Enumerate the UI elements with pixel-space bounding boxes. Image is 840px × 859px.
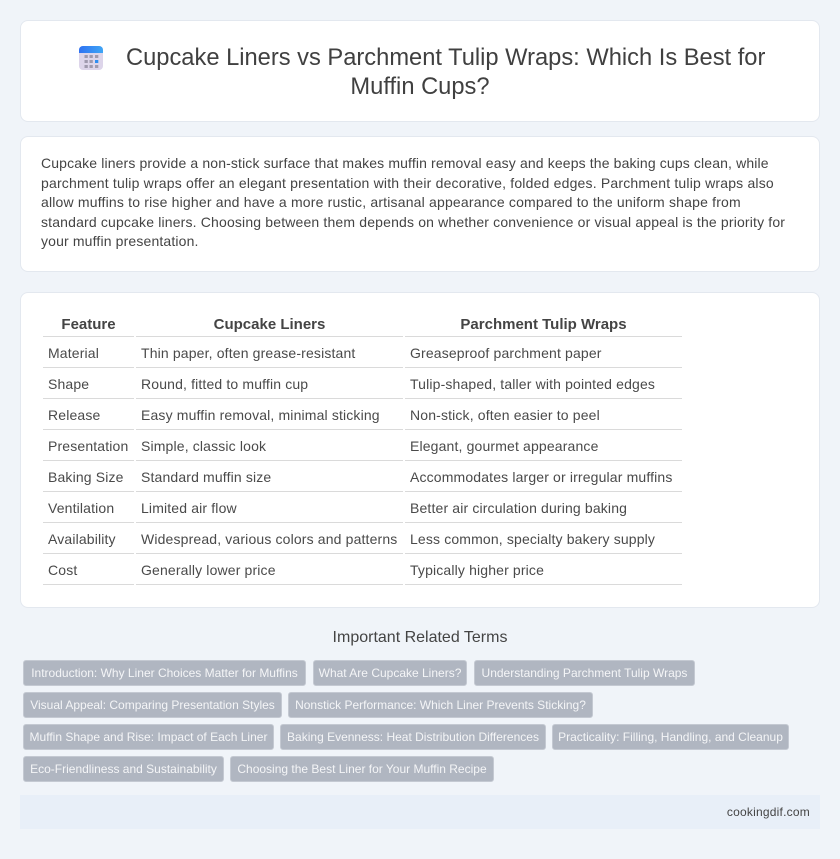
comparison table: Better air circulation during baking bbox=[410, 500, 627, 516]
comparison table: Typically higher price bbox=[410, 562, 544, 578]
related term tags bbox=[23, 660, 789, 782]
related term tags: Muffin Shape and Rise: Impact of Each Liner bbox=[30, 730, 267, 744]
intro text: allow muffins to rise higher and have a more rustic, artisanal appearance compared to the uniform shape from bbox=[41, 194, 741, 210]
comparison table: Availability bbox=[48, 531, 116, 547]
comparison table: Round, fitted to muffin cup bbox=[141, 376, 308, 392]
intro text: parchment tulip wraps offer an elegant presentation with their decorative, folded edges. Parchment tulip wraps also bbox=[41, 174, 774, 190]
comparison table: Limited air flow bbox=[141, 500, 237, 516]
related term tags: Practicality: Filling, Handling, and Cleanup bbox=[558, 730, 783, 744]
comparison table: Shape bbox=[48, 376, 89, 392]
related term tags: Choosing the Best Liner for Your Muffin Recipe bbox=[237, 762, 487, 776]
comparison table: Ventilation bbox=[48, 500, 114, 516]
icon: calendar bbox=[79, 46, 103, 70]
footer bar bbox=[20, 795, 820, 829]
comparison table: Feature bbox=[61, 316, 116, 333]
comparison table: Baking Size bbox=[48, 469, 124, 485]
comparison table: Non-stick, often easier to peel bbox=[410, 407, 600, 423]
panel: comparison table bbox=[20, 292, 820, 608]
comparison table: Elegant, gourmet appearance bbox=[410, 438, 599, 454]
title: Muffin Cups? bbox=[350, 74, 490, 100]
title: Cupcake Liners vs Parchment Tulip Wraps: Which Is Best for bbox=[126, 45, 765, 71]
comparison table: Accommodates larger or irregular muffins bbox=[410, 469, 673, 485]
comparison table: Parchment Tulip Wraps bbox=[460, 316, 627, 333]
title bbox=[126, 45, 765, 100]
comparison table: Tulip-shaped, taller with pointed edges bbox=[410, 376, 655, 392]
related term tags: What Are Cupcake Liners? bbox=[319, 666, 461, 680]
comparison table: Easy muffin removal, minimal sticking bbox=[141, 407, 380, 423]
related term tags: Understanding Parchment Tulip Wraps bbox=[482, 666, 687, 680]
header panel bbox=[20, 20, 820, 122]
comparison table: Material bbox=[48, 345, 99, 361]
related term tags: Visual Appeal: Comparing Presentation Styles bbox=[30, 698, 275, 712]
intro text: your muffin presentation. bbox=[41, 233, 199, 249]
comparison table: Greaseproof parchment paper bbox=[410, 345, 602, 361]
panel: introduction bbox=[20, 136, 820, 272]
intro text: standard cupcake liners. Choosing between them depends on whether convenience or visual appeal is the priority for bbox=[41, 214, 785, 230]
comparison table bbox=[43, 316, 682, 585]
comparison table: Thin paper, often grease-resistant bbox=[141, 345, 355, 361]
related term tags: Baking Evenness: Heat Distribution Differences bbox=[287, 730, 539, 744]
related terms heading: Important Related Terms bbox=[333, 629, 507, 646]
intro text: Cupcake liners provide a non-stick surface that makes muffin removal easy and keeps the baking cups clean, while bbox=[41, 155, 769, 171]
related term tags: Nonstick Performance: Which Liner Prevents Sticking? bbox=[295, 698, 586, 712]
related term tags: Introduction: Why Liner Choices Matter for Muffins bbox=[31, 666, 298, 680]
comparison table: Cupcake Liners bbox=[214, 316, 325, 333]
intro text bbox=[41, 155, 785, 249]
comparison table: Less common, specialty bakery supply bbox=[410, 531, 655, 547]
comparison table: Release bbox=[48, 407, 100, 423]
comparison table: Simple, classic look bbox=[141, 438, 266, 454]
comparison table: Generally lower price bbox=[141, 562, 276, 578]
comparison table: Cost bbox=[48, 562, 77, 578]
footer source: cookingdif.com bbox=[727, 805, 810, 819]
related term tags: Eco-Friendliness and Sustainability bbox=[30, 762, 217, 776]
comparison table: Widespread, various colors and patterns bbox=[141, 531, 397, 547]
comparison table: Presentation bbox=[48, 438, 128, 454]
comparison table: Standard muffin size bbox=[141, 469, 271, 485]
